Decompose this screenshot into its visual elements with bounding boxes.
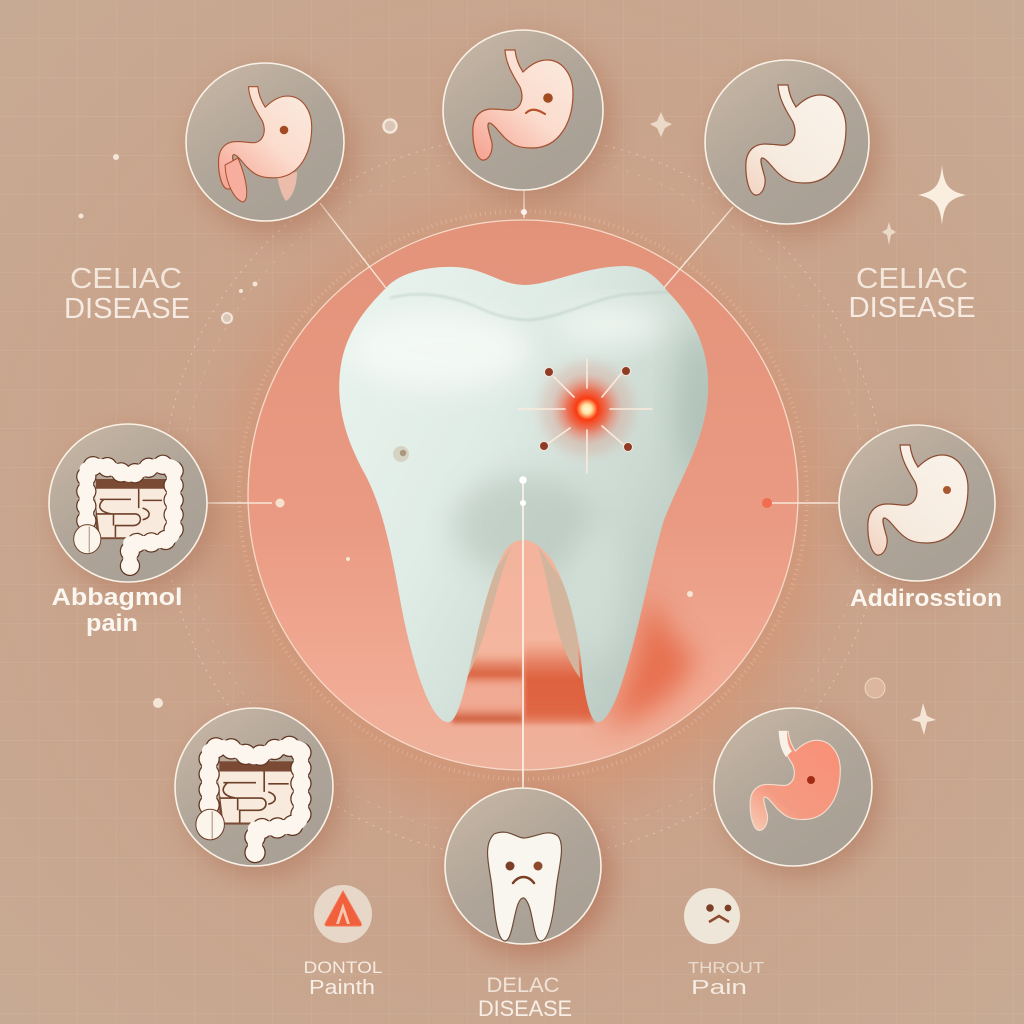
label: Abbagmol: Abbagmol <box>52 584 182 611</box>
centre vertical line <box>519 476 527 811</box>
label: Delac: DELAC <box>486 974 560 997</box>
label: left Celiac Disease: CELIAC <box>70 263 182 295</box>
icon circle: top left stomach <box>186 63 353 232</box>
tooth speck <box>393 446 409 462</box>
label: Throat: THROUT <box>688 960 764 977</box>
label: Disease bottom: DISEASE <box>478 996 572 1021</box>
label: left Disease: DISEASE <box>64 293 190 325</box>
pain glow <box>518 359 652 473</box>
sparkle: large right <box>918 165 966 225</box>
icon circle: right stomach <box>839 425 1004 592</box>
icon circle: top right stomach <box>705 60 877 234</box>
connector dots <box>276 209 772 508</box>
connector lines <box>207 190 838 503</box>
sad face badge <box>684 888 740 944</box>
label: Painth: Painth <box>309 977 375 999</box>
label: pain right: Pain <box>691 977 747 999</box>
icon circle: lower right stomach <box>714 708 880 876</box>
label: Addirosstion: Addirosstion <box>850 585 1002 612</box>
label: right Disease: DISEASE <box>848 292 976 324</box>
icon circle: bottom sad tooth <box>445 788 610 955</box>
icon circle: lower left intestine <box>175 708 341 876</box>
icon circle: top stomach sad <box>443 30 611 200</box>
central tooth <box>339 266 726 722</box>
label: right Celiac: CELIAC <box>856 263 968 295</box>
label: Dontol: DONTOL <box>304 958 382 977</box>
label: pain: pain <box>86 610 138 637</box>
icon circle: left intestine <box>49 424 215 592</box>
outer dashed rings <box>162 136 884 858</box>
decorative sparkles <box>78 112 936 735</box>
warning badge <box>314 885 372 943</box>
warm halo behind disc <box>223 210 823 810</box>
tooth floor shadows <box>452 530 696 726</box>
tooth root inner faces <box>468 546 580 678</box>
central salmon disc <box>248 220 798 770</box>
